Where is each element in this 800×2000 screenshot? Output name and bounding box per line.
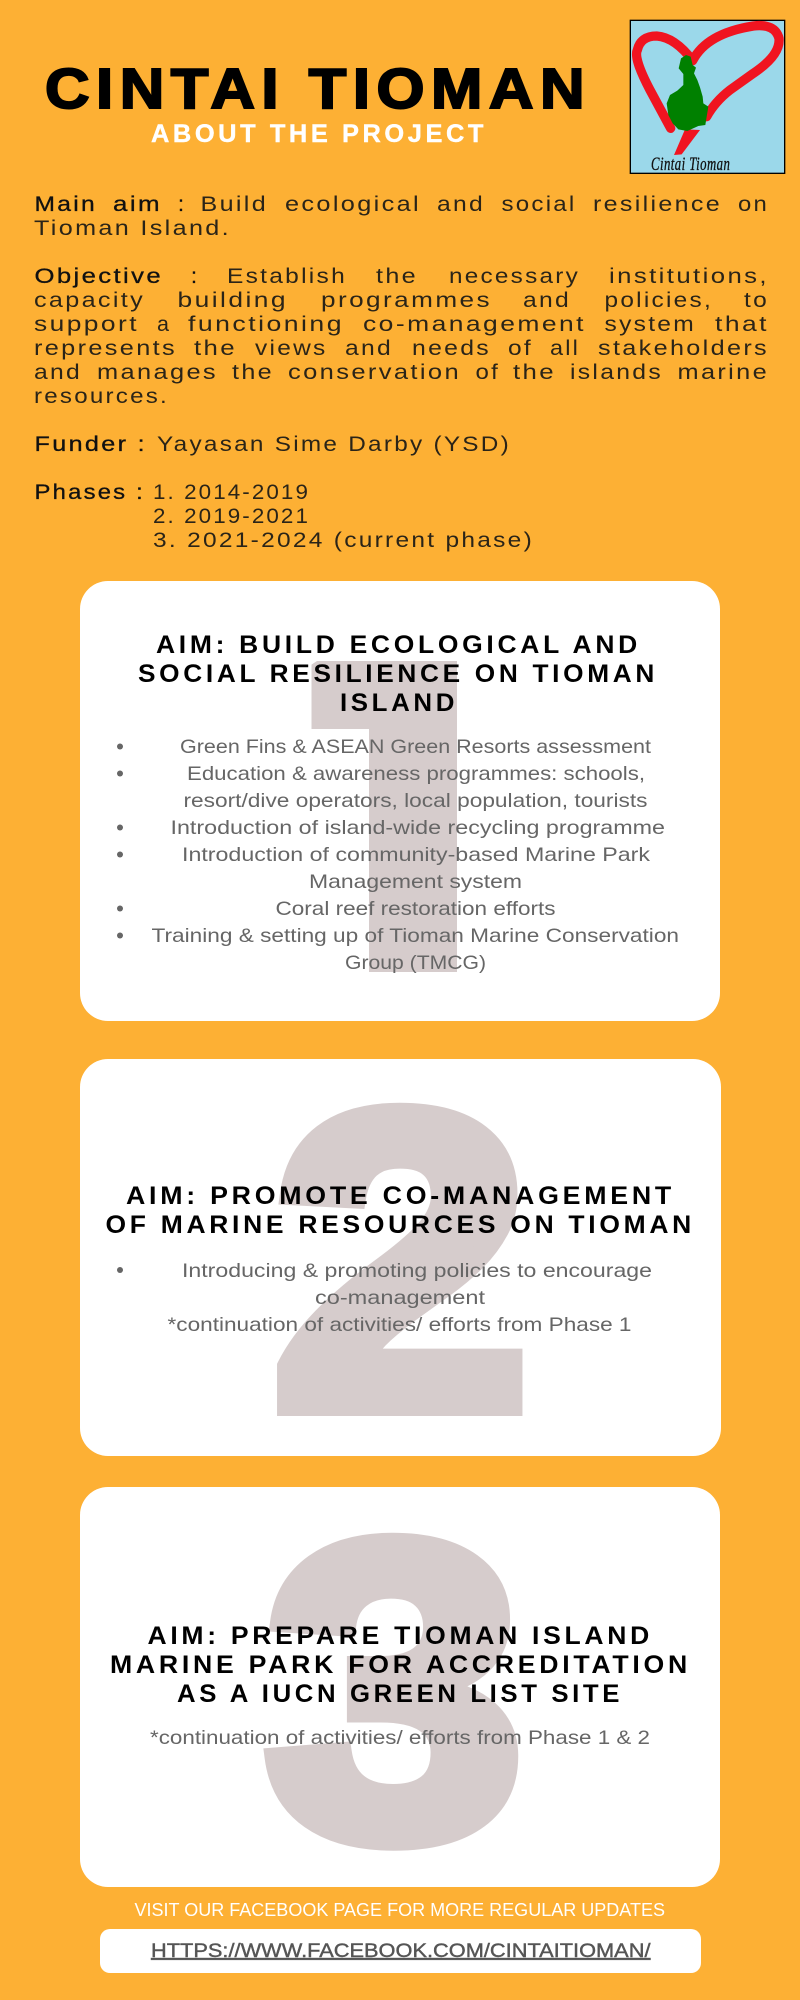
phase 1 bullet list: Group (TMCG): [345, 952, 486, 974]
text block: objective: to: [744, 288, 769, 312]
text block: objective: manages: [97, 360, 218, 384]
title: CINTAI TIOMAN: [45, 57, 591, 121]
icon: green island: [667, 55, 708, 131]
phase 3 note: *continuation of activities/ efforts from Phase 1 & 2: [150, 1727, 650, 1749]
text block: objective: system: [604, 312, 696, 336]
text block: phases: 1. 2014-2019: [153, 480, 310, 504]
text block: objective: functioning: [188, 312, 344, 336]
phase 1 bullet list: Management system: [309, 871, 522, 893]
text block: objective: :: [191, 264, 199, 288]
subtitle: ABOUT THE PROJECT: [151, 120, 487, 148]
large numeral 2: 2: [272, 1027, 530, 1496]
text block: objective: the: [194, 336, 237, 360]
icon: Cintai Tioman logo: [630, 20, 785, 175]
logo caption: Cintai Tioman: [651, 154, 730, 175]
phase 2 bullet list: co-management: [315, 1287, 486, 1309]
panel: phase 1: [80, 581, 720, 1021]
phase 2 heading: AIM: PROMOTE CO-MANAGEMENT: [126, 1182, 675, 1210]
text block: objective: institutions,: [609, 264, 769, 288]
text block: main aim: Tioman Island.: [34, 216, 231, 240]
text block: objective: building: [178, 288, 288, 312]
phase 1 bullet list: Introduction of island-wide recycling programme: [170, 817, 665, 839]
text block: objective: and: [345, 336, 393, 360]
phase 1 heading: AIM: BUILD ECOLOGICAL AND: [156, 631, 641, 659]
text block: objective: of: [476, 360, 500, 384]
text block: main aim: aim: [113, 192, 162, 216]
text block: objective: the: [376, 264, 418, 288]
text block: objective: Objective: [34, 264, 163, 288]
phase 1 heading: [138, 631, 658, 717]
phase 1 bullet list: resort/dive operators, local population, tourists: [184, 790, 648, 812]
text block: objective: Establish: [227, 264, 347, 288]
text block: objective: needs: [412, 336, 491, 360]
text block: objective: resources.: [34, 384, 169, 408]
text block: main aim: :: [178, 192, 186, 216]
text block: objective: the: [232, 360, 274, 384]
text block: main aim: Main: [34, 192, 97, 216]
footer call to action: VISIT OUR FACEBOOK PAGE FOR MORE REGULAR UPDATES: [134, 1900, 665, 1920]
phase 1 heading: ISLAND: [340, 689, 458, 717]
text block: phases: Phases :: [34, 480, 145, 504]
text block: funder: Funder :: [34, 432, 147, 456]
text block: phases: [34, 480, 534, 552]
phase 1 bullet list: Green Fins & ASEAN Green Resorts assessment: [180, 736, 652, 758]
panel: phase 2: [80, 1027, 721, 1496]
text block: main aim: Build: [200, 192, 268, 216]
text block: main aim: [34, 192, 769, 240]
text block: objective: co-management: [363, 312, 586, 336]
phase 3 heading: AS A IUCN GREEN LIST SITE: [177, 1680, 623, 1708]
text block: objective: and: [523, 288, 571, 312]
phase 1 bullet list: Introduction of community-based Marine Park: [182, 844, 650, 866]
text block: objective: stakeholders: [598, 336, 769, 360]
footer link button: HTTPS://WWW.FACEBOOK.COM/CINTAITIOMAN/: [151, 1941, 651, 1962]
text block: funder: Yayasan Sime Darby (YSD): [157, 432, 511, 456]
text block: objective: a: [157, 312, 171, 336]
text block: objective: represents: [34, 336, 177, 360]
text block: objective: that: [715, 312, 769, 336]
text block: phases: 3. 2021-2024 (current phase): [153, 528, 534, 552]
large numeral 1: 1: [281, 575, 526, 1066]
text block: objective: programmes: [321, 288, 492, 312]
text block: objective: marine: [678, 360, 769, 384]
text block: main aim: resilience: [593, 192, 722, 216]
phase 1 bullet list: Coral reef restoration efforts: [276, 898, 556, 920]
text block: main aim: social: [502, 192, 576, 216]
text block: objective: of: [508, 336, 533, 360]
text block: phases: 2. 2019-2021: [153, 504, 310, 528]
text block: objective: the: [513, 360, 556, 384]
text block: objective: [34, 264, 769, 408]
text block: main aim: and: [437, 192, 485, 216]
icon: red heart tail: [674, 129, 700, 155]
footer link button: [100, 1929, 701, 1973]
phase 3 heading: MARINE PARK FOR ACCREDITATION: [110, 1651, 691, 1679]
text block: main aim: on: [738, 192, 769, 216]
text block: objective: capacity: [34, 288, 145, 312]
phase 3 heading: [110, 1622, 691, 1708]
text block: objective: support: [34, 312, 139, 336]
phase 2 heading: [106, 1182, 695, 1239]
phase 3 heading: AIM: PREPARE TIOMAN ISLAND: [148, 1622, 653, 1650]
text block: objective: views: [255, 336, 328, 360]
phase 2 bullet list: [117, 1260, 652, 1336]
large numeral 3: 3: [265, 1457, 524, 1926]
phase 2 bullet list: *continuation of activities/ efforts from Phase 1: [168, 1314, 632, 1336]
text block: objective: and: [34, 360, 82, 384]
text block: objective: all: [550, 336, 580, 360]
text block: objective: policies,: [604, 288, 713, 312]
panel: phase 3: [80, 1457, 720, 1926]
text block: main aim: ecological: [285, 192, 421, 216]
text block: objective: conservation: [288, 360, 461, 384]
icon: red heart outline: [637, 26, 779, 128]
text block: objective: islands: [570, 360, 663, 384]
phase 2 heading: OF MARINE RESOURCES ON TIOMAN: [106, 1211, 695, 1239]
text block: funder: [34, 432, 511, 456]
phase 1 heading: SOCIAL RESILIENCE ON TIOMAN: [138, 660, 658, 688]
phase 1 bullet list: [117, 736, 679, 974]
phase 2 bullet list: Introducing & promoting policies to encourage: [182, 1260, 652, 1282]
phase 1 bullet list: Education & awareness programmes: schools,: [187, 763, 645, 785]
phase 1 bullet list: Training & setting up of Tioman Marine Conservation: [152, 925, 679, 947]
text block: objective: necessary: [449, 264, 580, 288]
